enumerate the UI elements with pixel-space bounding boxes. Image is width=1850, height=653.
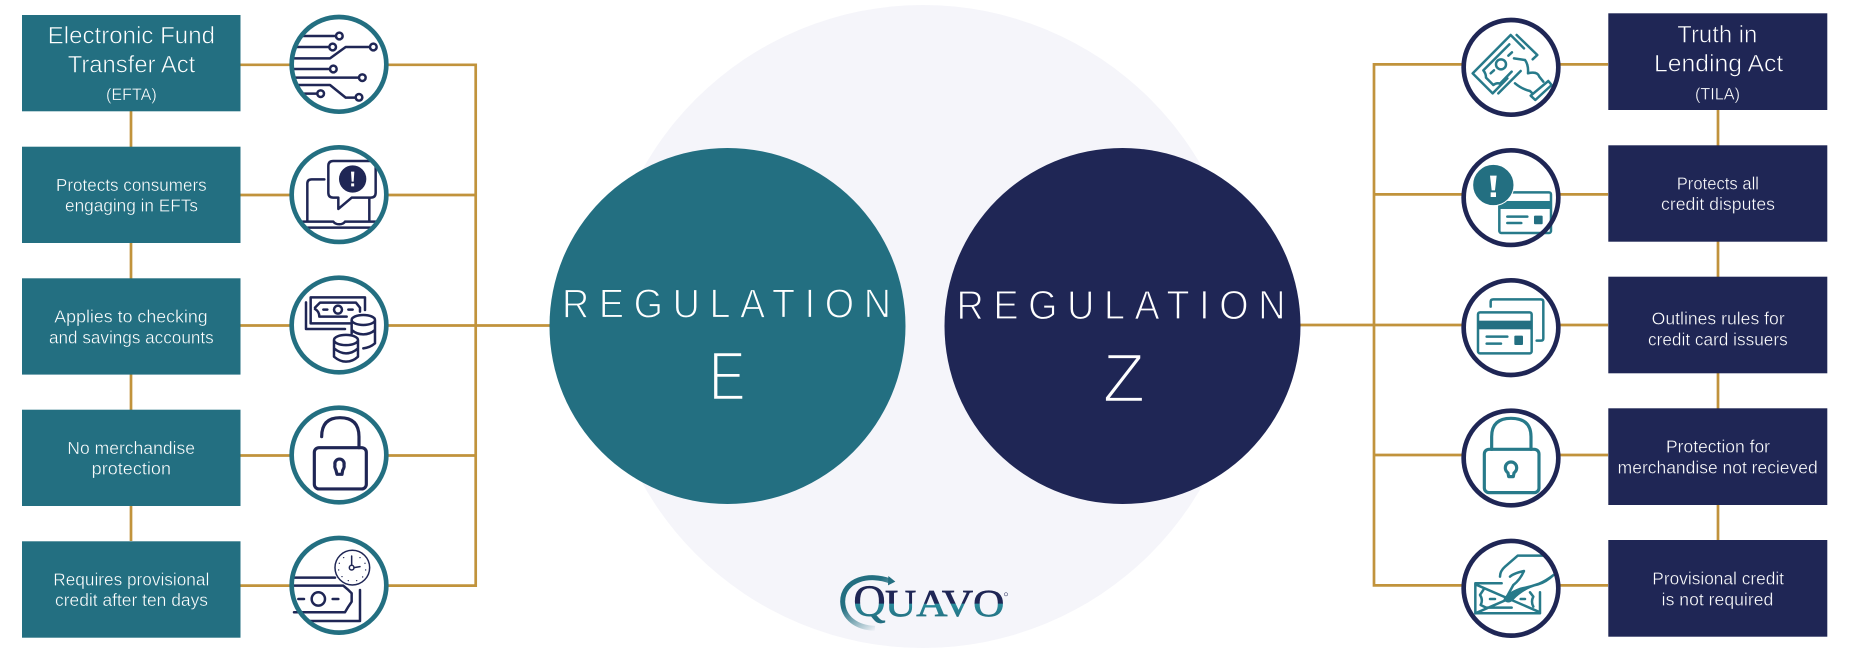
icon: circuit (292, 17, 386, 112)
circle: Regulation E: E (709, 337, 746, 415)
box: Outlines rules for credit card issuers: credit card issuers (1648, 329, 1788, 349)
icon: hand placing cash in envelope (1464, 541, 1558, 636)
circle: Regulation E (550, 148, 906, 504)
box: Applies to checking and savings accounts: Applies to checking (54, 307, 208, 327)
box: Applies to checking and savings accounts: and savings accounts (49, 327, 214, 347)
box: Requires provisional credit after ten days: credit after ten days (55, 590, 208, 610)
icon: bill with clock (292, 538, 386, 633)
box: Truth in Lending Act: Truth in (1677, 22, 1757, 49)
box: Outlines rules for credit card issuers (1608, 277, 1827, 373)
circle: Regulation Z: REGULATION (956, 283, 1285, 328)
logo: Quavo (843, 576, 1008, 628)
box: Requires provisional credit after ten days (22, 541, 240, 638)
connector lines: Regulation Z side (1300, 64, 1718, 585)
box: Protects all credit disputes: credit disputes (1661, 194, 1775, 214)
icon: credit cards (1464, 280, 1558, 375)
box: Truth in Lending Act: Lending Act (1654, 51, 1784, 78)
icon: cash and coins (292, 278, 386, 372)
box: Requires provisional credit after ten days: Requires provisional (53, 569, 209, 589)
circle: Regulation E: REGULATION (562, 281, 891, 327)
connector lines: Regulation E side (131, 65, 550, 586)
background circle (602, 5, 1244, 648)
box: Protects consumers engaging in EFTs: Protects consumers (56, 175, 207, 195)
circle: Regulation Z (944, 148, 1300, 504)
box: Electronic Fund Transfer Act (22, 15, 240, 111)
icon: hand with cash (1464, 20, 1558, 115)
box: No merchandise protection: protection (92, 459, 171, 479)
box: Protects all credit disputes (1608, 145, 1827, 242)
box: Electronic Fund Transfer Act: Electronic Fund (48, 22, 215, 50)
box: Protects consumers engaging in EFTs (22, 147, 240, 243)
box: Electronic Fund Transfer Act: (EFTA) (106, 86, 157, 104)
icon: closed padlock (1464, 411, 1558, 505)
box: Electronic Fund Transfer Act: Transfer Act (68, 52, 196, 78)
box: Provisional credit is not required: is not required (1662, 589, 1773, 609)
box: Applies to checking and savings accounts (22, 278, 240, 375)
icon: credit card alert (1464, 150, 1558, 245)
box: Protects all credit disputes: Protects all (1677, 173, 1759, 193)
box: No merchandise protection: No merchandise (67, 438, 195, 458)
box: Truth in Lending Act (1608, 13, 1827, 110)
icon: laptop alert (292, 147, 386, 242)
logo: Quavo: Q (853, 576, 886, 626)
circle: Regulation Z: Z (1102, 339, 1145, 417)
box: Protection for merchandise not recieved (1608, 408, 1827, 505)
box: Truth in Lending Act: (TILA) (1695, 85, 1740, 103)
box: Protects consumers engaging in EFTs: engaging in EFTs (65, 196, 198, 216)
box: Provisional credit is not required: Provisional credit (1652, 569, 1784, 589)
icon: open padlock (292, 408, 386, 502)
logo: Quavo: UAVO (885, 583, 1004, 625)
box: Protection for merchandise not recieved: merchandise not recieved (1618, 457, 1818, 477)
box: Provisional credit is not required (1608, 540, 1827, 637)
box: No merchandise protection (22, 410, 240, 506)
box: Protection for merchandise not recieved: Protection for (1666, 437, 1770, 457)
box: Outlines rules for credit card issuers: Outlines rules for (1652, 309, 1785, 329)
